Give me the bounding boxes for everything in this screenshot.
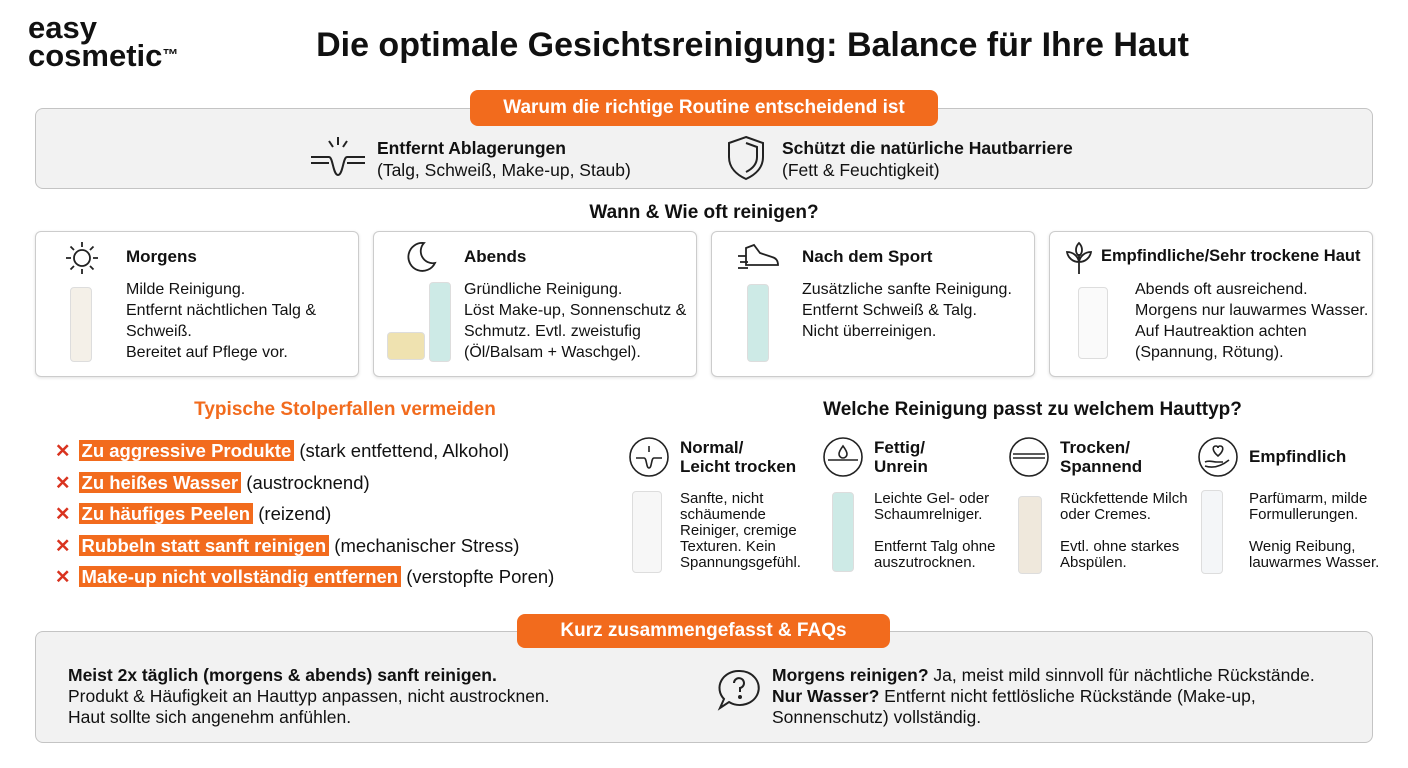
card: sensitive: Auf Hautreaktion achten [1135,323,1307,340]
column: dry [1009,437,1188,574]
text: FAQ: Sonnenschutz) vollständig. [772,707,981,727]
column: normal: Texturen. Kein [680,538,776,555]
card: evening: Abends [464,247,526,266]
product [1078,287,1108,359]
icon: pore [311,137,365,176]
product [747,284,769,362]
card: sensitive [1049,231,1373,377]
text: protects barrier: Schützt die natürliche Hautbarriere [782,138,1073,158]
column: normal: Leicht trocken [680,457,796,476]
column: oily: Leichte Gel- oder [874,490,989,507]
icon: sun [66,242,98,274]
list: pitfalls: ✕ Make-up nicht vollständig entfernen (verstopfte Poren) [55,566,554,587]
text: summary: Haut sollte sich angenehm anfühlen. [68,707,351,727]
card: evening [373,231,697,377]
list: pitfalls: ✕ Zu aggressive Produkte (stark entfettend, Alkohol) [55,440,509,461]
column: oily: Entfernt Talg ohne [874,538,995,555]
text: FAQ: Nur Wasser? Entfernt nicht fettlösliche Rückstände (Make-up, [772,686,1256,706]
card: morning [35,231,359,377]
text: summary [68,665,550,727]
logo [28,10,178,73]
column: dry: Abspülen. [1060,554,1127,571]
column: sensitive [1198,437,1379,574]
icon: question bubble [718,670,760,711]
card: morning: Schweiß. [126,323,192,340]
text: removes deposits [377,138,631,180]
card: sport: Nicht überreinigen. [802,323,936,340]
icon: shoe [738,244,779,269]
pill: summary: Kurz zusammengefasst & FAQs [560,620,847,641]
card: sport: Nach dem Sport [802,247,932,266]
column: sensitive: Parfümarm, milde [1249,490,1367,507]
icon: moon [407,242,436,272]
logo: easy [28,10,97,45]
column: oily: Unrein [874,457,928,476]
panel: summary & FAQ [35,631,1373,743]
list: pitfalls: ✕ Zu häufiges Peelen (reizend) [55,503,331,524]
card: evening: Schmutz. Evtl. zweistufig [464,323,641,340]
card: sensitive: Morgens nur lauwarmes Wasser. [1135,302,1368,319]
column: sensitive: lauwarmes Wasser. [1249,554,1379,571]
column: normal [629,437,801,573]
panel: why routine [35,108,1373,189]
icon: leaf [1066,242,1092,274]
text: protects barrier [782,138,1073,180]
column: normal: Spannungsgefühl. [680,554,801,571]
column: normal: Sanfte, nicht [680,490,763,507]
column: normal: schäumende [680,506,766,523]
column: normal: Reiniger, cremige [680,522,797,539]
text: removes deposits: (Talg, Schweiß, Make-up, Staub) [377,160,631,180]
card: sport [711,231,1035,377]
list: pitfalls [55,440,554,587]
heading: skin types: Welche Reinigung passt zu welchem Hauttyp? [823,399,1242,420]
list: pitfalls: ✕ Rubbeln statt sanft reinigen (mechanischer Stress) [55,535,519,556]
text: protects barrier: (Fett & Feuchtigkeit) [782,160,940,180]
column: oily: Fettig/ [874,438,925,457]
list: pitfalls: ✕ Zu heißes Wasser (austrocknend) [55,472,370,493]
pill: why [470,90,938,126]
card: sensitive: Abends oft ausreichend. [1135,281,1308,298]
card: sensitive: (Spannung, Rötung). [1135,344,1284,361]
card: sensitive: Empfindliche/Sehr trockene Haut [1101,247,1360,265]
card: morning: Entfernt nächtlichen Talg & [126,302,316,319]
logo: cosmetic™ [28,38,178,73]
column: sensitive: Empfindlich [1249,447,1346,466]
column: sensitive: Formullerungen. [1249,506,1358,523]
pill: summary [517,614,890,648]
title: Die optimale Gesichtsreinigung: Balance für Ihre Haut [316,26,1189,64]
card: sport: Entfernt Schweiß & Talg. [802,302,977,319]
column: dry: Evtl. ohne starkes [1060,538,1179,555]
card: evening: Löst Make-up, Sonnenschutz & [464,302,686,319]
text: summary: Produkt & Häufigkeit an Hauttyp anpassen, nicht austrocknen. [68,686,550,706]
heading: when: Wann & Wie oft reinigen? [589,202,819,223]
card: morning: Bereitet auf Pflege vor. [126,344,288,361]
pill: why: Warum die richtige Routine entscheidend ist [503,97,905,118]
column: normal: Normal/ [680,438,743,457]
column: oily: Schaumrelniger. [874,506,982,523]
card: morning: Morgens [126,247,197,266]
text: FAQ [772,665,1315,727]
card: evening: (Öl/Balsam + Waschgel). [464,344,641,361]
card: morning: Milde Reinigung. [126,281,245,298]
card: evening: Gründliche Reinigung. [464,281,622,298]
card: sport: Zusätzliche sanfte Reinigung. [802,281,1012,298]
icon: shield [728,136,764,180]
text: FAQ: Morgens reinigen? Ja, meist mild sinnvoll für nächtliche Rückstände. [772,665,1315,685]
column: sensitive: Wenig Reibung, [1249,538,1355,555]
column: dry: Trocken/ [1060,438,1130,457]
heading: pitfalls: Typische Stolperfallen vermeiden [194,399,496,420]
text: summary: Meist 2x täglich (morgens & abends) sanft reinigen. [68,665,497,685]
text: removes deposits: Entfernt Ablagerungen [377,138,566,158]
column: dry: Rückfettende Milch [1060,490,1188,507]
product [70,287,92,362]
column: oily [823,437,995,572]
column: dry: Spannend [1060,457,1142,476]
products [387,332,425,360]
column: oily: auszutrocknen. [874,554,976,571]
column: dry: oder Cremes. [1060,506,1151,523]
